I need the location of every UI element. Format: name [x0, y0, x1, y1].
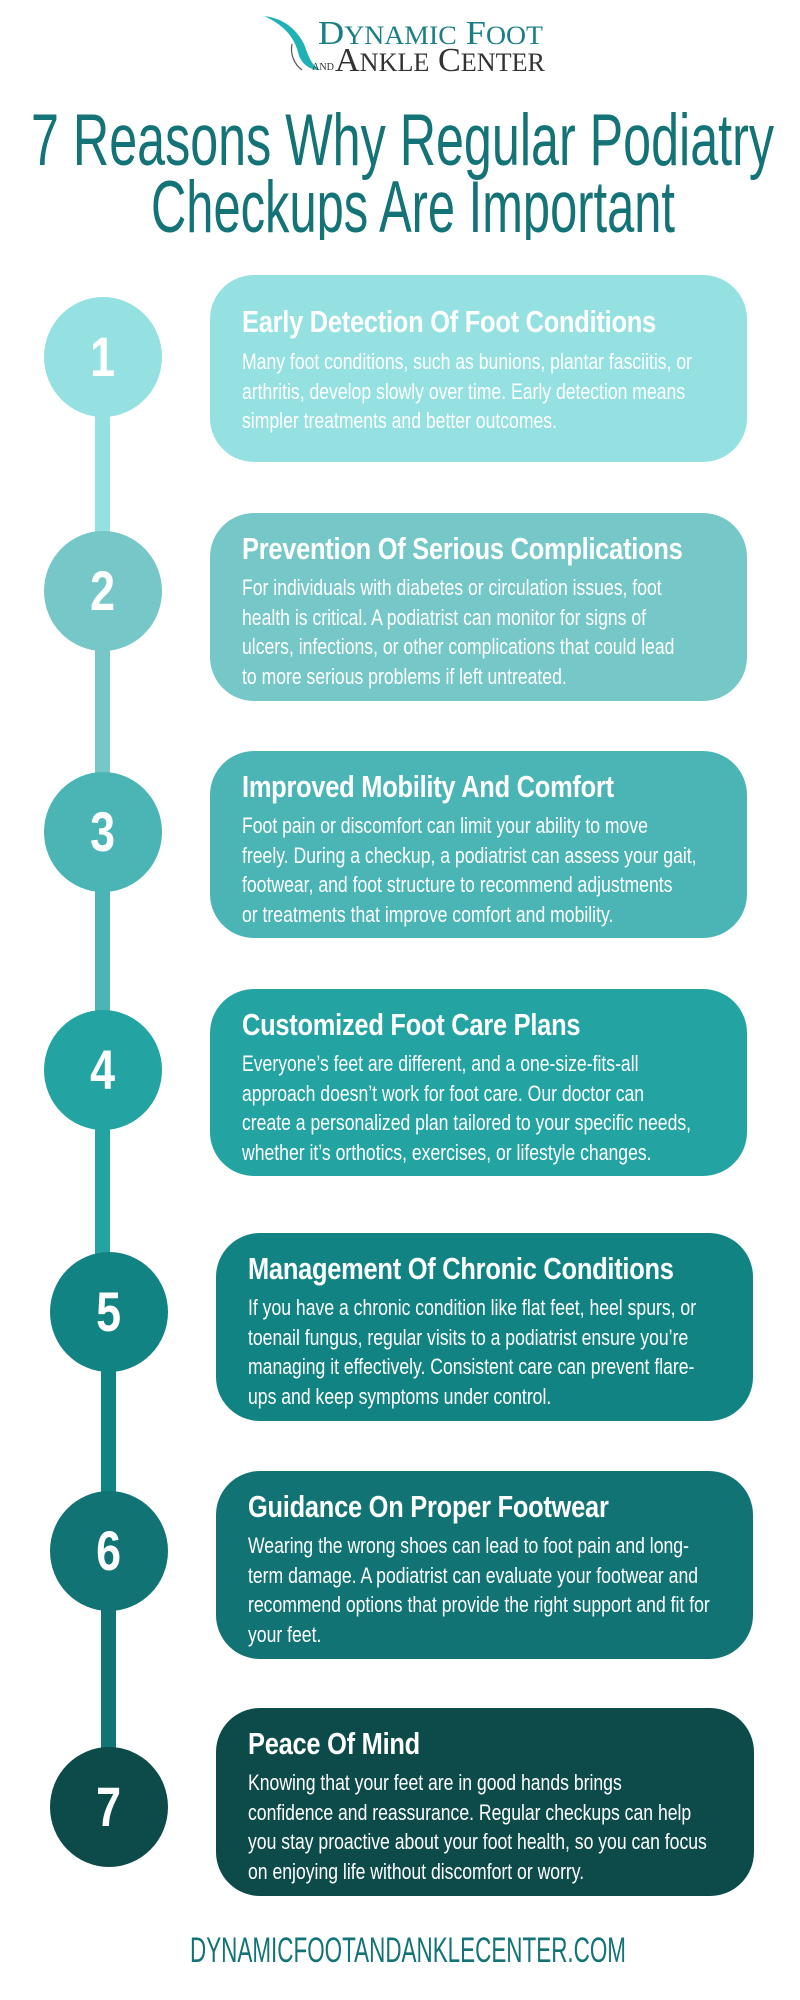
text 6: recommend options that provide the right support and fit for [248, 1592, 710, 1617]
logo text: AND [312, 61, 334, 73]
logo text [312, 15, 546, 74]
timeline stems [95, 416, 116, 1748]
circle 6 [50, 1491, 168, 1611]
panel 6 [216, 1471, 753, 1659]
text 4: whether it’s orthotics, exercises, or lifestyle changes. [242, 1140, 652, 1164]
text 1: simpler treatments and better outcomes. [242, 408, 557, 433]
circle 4 [44, 1010, 162, 1130]
heading 1: Early Detection Of Foot Conditions [242, 304, 656, 339]
icon: swoosh [264, 16, 320, 70]
circle 1: 1 [91, 325, 115, 388]
panel 5 [216, 1233, 753, 1421]
heading 6: Guidance On Proper Footwear [248, 1489, 609, 1524]
heading 5: Management Of Chronic Conditions [248, 1251, 674, 1286]
text 4: approach doesn’t work for foot care. Our doctor can [242, 1080, 644, 1106]
text 1: Many foot conditions, such as bunions, plantar fasciitis, or [242, 349, 692, 374]
logo [264, 15, 546, 74]
circle 5 [50, 1252, 168, 1372]
logo text: DYNAMIC FOOT [318, 15, 543, 52]
heading 2: Prevention Of Serious Complications [242, 531, 683, 566]
text 2: ulcers, infections, or other complications that could lead [242, 634, 674, 659]
text 7: you stay proactive about your foot health, so you can focus [248, 1829, 707, 1854]
heading 7: Peace Of Mind [248, 1726, 420, 1761]
circle 6: 6 [97, 1519, 121, 1582]
text 3: or treatments that improve comfort and mobility. [242, 902, 613, 926]
text 5: If you have a chronic condition like flat feet, heel spurs, or [248, 1295, 696, 1320]
text 1 [242, 349, 692, 433]
circle 2 [44, 531, 162, 651]
text 2: to more serious problems if left untreated. [242, 664, 567, 688]
text 7: on enjoying life without discomfort or worry. [248, 1858, 584, 1884]
circle 3 [44, 772, 162, 892]
circle 3: 3 [91, 800, 115, 863]
text 7 [248, 1770, 707, 1884]
text 2: For individuals with diabetes or circulation issues, foot [242, 575, 662, 600]
heading 4: Customized Foot Care Plans [242, 1007, 580, 1042]
title [31, 100, 774, 240]
text 7: confidence and reassurance. Regular checkups can help [248, 1800, 691, 1824]
heading 3: Improved Mobility And Comfort [242, 769, 614, 804]
text 5: toenail fungus, regular visits to a podiatrist ensure you’re [248, 1324, 688, 1350]
text 5 [248, 1295, 696, 1408]
text 7: Knowing that your feet are in good hands brings [248, 1770, 622, 1795]
text 6: your feet. [248, 1622, 321, 1646]
circle 1 [44, 297, 162, 417]
text 2: health is critical. A podiatrist can monitor for signs of [242, 604, 646, 630]
circle 7: 7 [97, 1775, 121, 1838]
text 3 [242, 813, 697, 926]
text 4: create a personalized plan tailored to your specific needs, [242, 1110, 691, 1135]
panel 2 [210, 513, 747, 701]
text 1: arthritis, develop slowly over time. Early detection means [242, 378, 685, 404]
text 5: ups and keep symptoms under control. [248, 1384, 551, 1408]
circle 4: 4 [91, 1038, 115, 1101]
circle 7 [50, 1747, 168, 1867]
text 4: Everyone’s feet are different, and a one-size-fits-all [242, 1051, 639, 1076]
circle 2: 2 [91, 559, 115, 622]
text 6: Wearing the wrong shoes can lead to foot pain and long- [248, 1533, 689, 1558]
panel 7 [216, 1708, 754, 1896]
text 6 [248, 1533, 710, 1646]
text 3: footwear, and foot structure to recommend adjustments [242, 872, 672, 897]
text 5: managing it effectively. Consistent care can prevent flare- [248, 1354, 694, 1379]
text 4 [242, 1051, 691, 1164]
text 6: term damage. A podiatrist can evaluate your footwear and [248, 1562, 698, 1588]
panel 4 [210, 989, 747, 1176]
panel 1 [210, 275, 747, 462]
circle 5: 5 [97, 1280, 121, 1343]
text 3: Foot pain or discomfort can limit your ability to move [242, 813, 648, 838]
text 2 [242, 575, 674, 688]
panel 3 [210, 751, 747, 938]
text 3: freely. During a checkup, a podiatrist can assess your gait, [242, 842, 697, 868]
